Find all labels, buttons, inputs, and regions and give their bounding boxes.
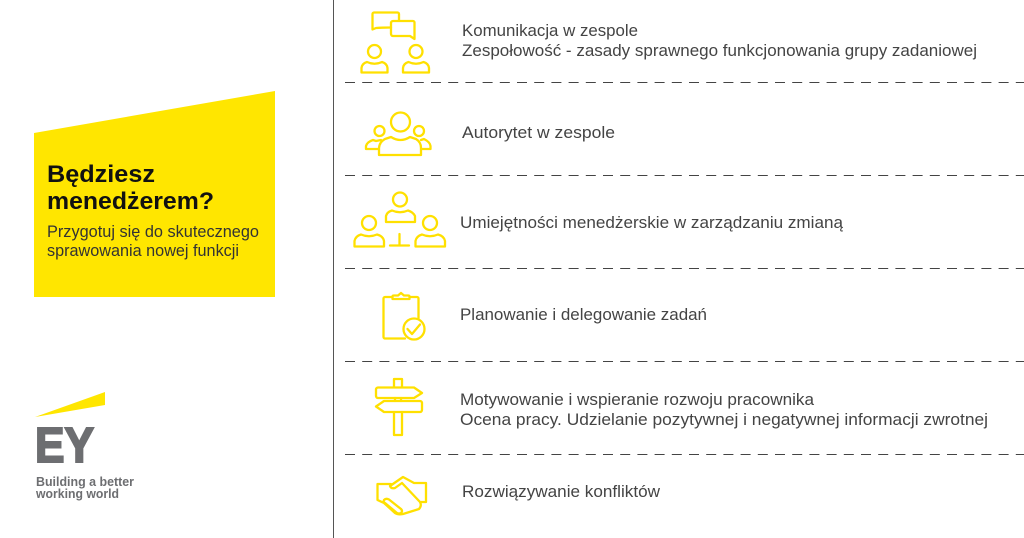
text: team communication: Zespołowość - zasady sprawnego funkcjonowania grupy zadaniowej (462, 42, 977, 60)
icon: signpost (376, 379, 422, 435)
text: managerial skills: Umiejętności menedżerskie w zarządzaniu zmianą (460, 214, 844, 232)
icon: handshake (378, 477, 426, 514)
heading: menedżerem? (47, 188, 214, 215)
icon: clipboard with check (384, 293, 424, 340)
text: resolving conflicts: Rozwiązywanie konfliktów (462, 483, 660, 501)
EY logo (35, 392, 134, 501)
icon: group with leader (366, 112, 430, 155)
subheading: sprawowania nowej funkcji (47, 242, 239, 260)
heading: Będziesz (47, 161, 155, 188)
EY logo: EY (35, 419, 94, 473)
text: planning and delegating: Planowanie i delegowanie zadań (460, 306, 707, 324)
text: motivating and developing: Motywowanie i wspieranie rozwoju pracownika (460, 391, 815, 409)
text: team communication (462, 22, 977, 60)
EY logo: working world (35, 487, 119, 501)
subheading (47, 223, 259, 260)
text: team communication: Komunikacja w zespole (462, 22, 638, 40)
subheading: Przygotuj się do skutecznego (47, 223, 259, 241)
EY logo: Building a better (36, 475, 134, 489)
text: motivating and developing: Ocena pracy. Udzielanie pozytywnej i negatywnej informacji zwrotnej (460, 411, 988, 429)
text: motivating and developing (460, 391, 988, 429)
heading (47, 161, 214, 215)
icon: speech bubbles and two people (362, 12, 429, 72)
text: authority: Autorytet w zespole (462, 124, 615, 142)
panel: title card (34, 91, 275, 297)
icon: three people org structure (354, 192, 445, 246)
